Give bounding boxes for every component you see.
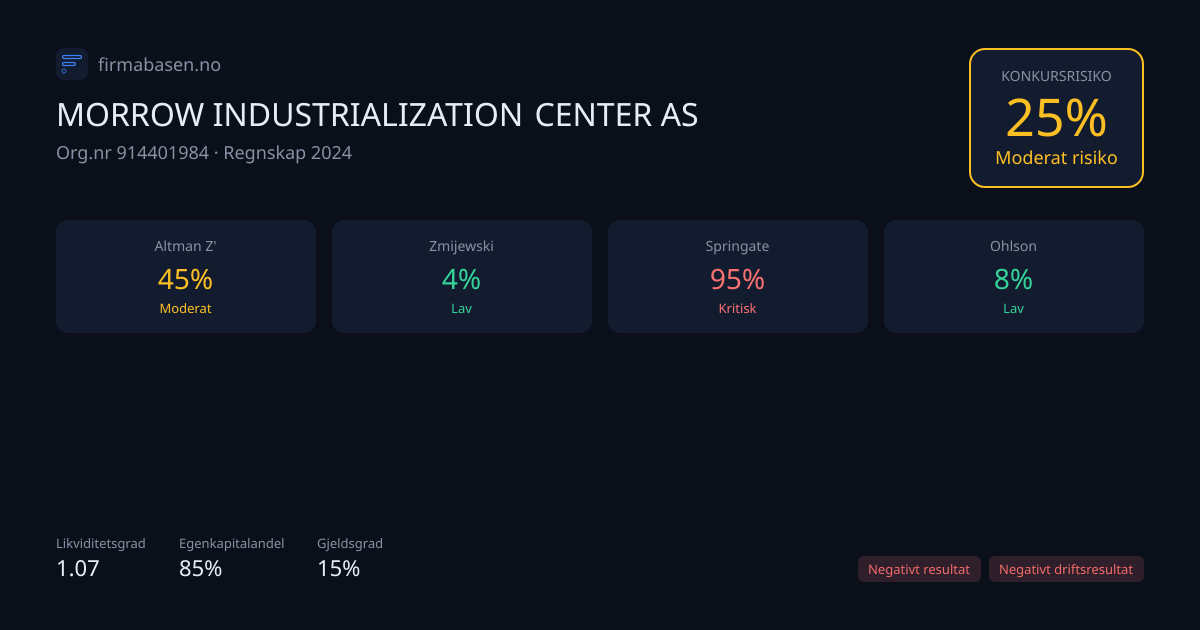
panel: Ohlson — [884, 220, 1144, 333]
panel: Zmijewski: 4% — [442, 260, 481, 298]
metric: liquidity ratio — [56, 534, 146, 583]
risk label: KONKURSRISIKO — [1001, 67, 1112, 86]
tag: negative operating result: Negativt driftsresultat — [999, 560, 1133, 578]
panel: Zmijewski: Lav — [451, 299, 472, 317]
org number and fiscal year: Org.nr 914401984 · Regnskap 2024 — [56, 141, 352, 165]
metric: equity ratio: 85% — [179, 553, 222, 583]
panel: Zmijewski — [332, 220, 592, 333]
metric: equity ratio: Egenkapitalandel — [179, 534, 285, 552]
tag: negative operating result — [989, 556, 1144, 582]
metric: debt ratio — [317, 534, 383, 583]
tag: negative result — [858, 556, 981, 582]
tag: negative result: Negativt resultat — [868, 560, 970, 578]
panel: Altman Z': Altman Z' — [154, 237, 216, 256]
metric: liquidity ratio: Likviditetsgrad — [56, 534, 146, 552]
panel: Springate: Kritisk — [718, 299, 756, 317]
panel: Ohlson: 8% — [994, 260, 1033, 298]
metric: liquidity ratio: 1.07 — [56, 553, 100, 583]
panel: Springate — [608, 220, 868, 333]
risk percentage: 25% — [1005, 81, 1108, 152]
panel: Springate: 95% — [710, 260, 765, 298]
brand name: firmabasen.no — [98, 53, 221, 77]
metric: debt ratio: 15% — [317, 553, 360, 583]
company title: MORROW INDUSTRIALIZATION CENTER AS — [56, 93, 699, 136]
metric: debt ratio: Gjeldsgrad — [317, 534, 383, 552]
panel: Ohlson: Lav — [1003, 299, 1024, 317]
risk level: Moderat risiko — [995, 146, 1118, 170]
panel: Zmijewski: Zmijewski — [429, 237, 494, 256]
panel: Ohlson: Ohlson — [990, 237, 1037, 256]
metric: equity ratio — [179, 534, 285, 583]
panel: Altman Z' — [56, 220, 316, 333]
panel: overall bankruptcy risk — [969, 48, 1144, 188]
panel: Altman Z': 45% — [158, 260, 213, 298]
panel: Altman Z': Moderat — [159, 299, 212, 317]
panel: Springate: Springate — [706, 237, 769, 256]
logo icon — [56, 48, 88, 80]
